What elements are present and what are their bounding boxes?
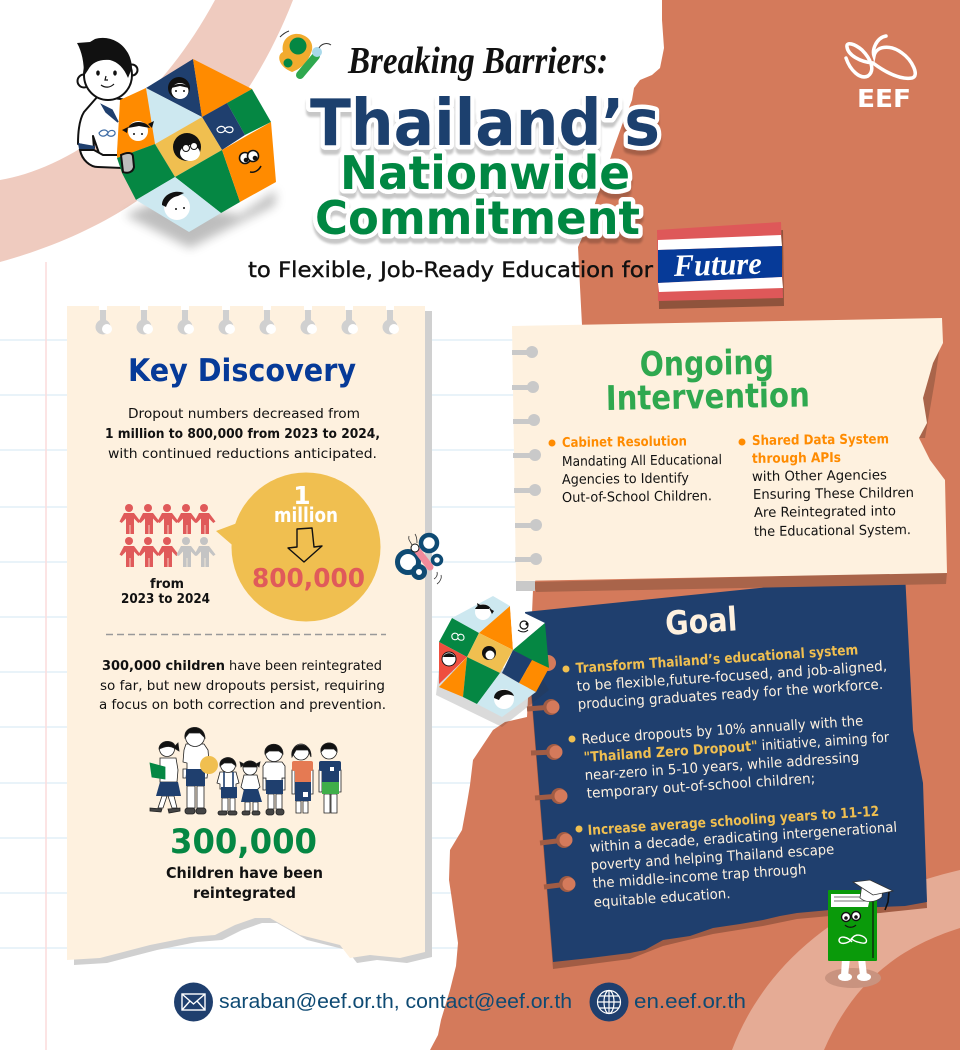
heading: Ongoing Intervention	[605, 343, 810, 419]
contact: website	[590, 982, 746, 1022]
text: dropout numbers: 1 million to 800,000 from 2023 to 2024,	[105, 426, 380, 442]
text: dropout numbers: Dropout numbers decreased from	[128, 406, 360, 422]
paper shadow	[525, 579, 927, 969]
contact: email: saraban@eef.or.th, contact@eef.or.th	[219, 991, 572, 1013]
item: Cabinet Resolution: Agencies to Identify	[562, 470, 689, 488]
girl with pigtails	[240, 761, 262, 815]
goal item 3	[576, 804, 898, 911]
boy navy shirt green shorts	[319, 743, 341, 813]
callout: 1 million to 800,000: million	[274, 503, 338, 527]
goal item 1: to be flexible,future-focused, and job-aligned,	[576, 658, 888, 695]
contact: email	[174, 982, 572, 1022]
item: Shared Data System: Are Reintegrated into	[754, 503, 896, 521]
graduation cap	[853, 880, 893, 910]
logo: EEF: EEF	[857, 84, 911, 113]
title: Thailand's Nationwide Commitment: Nationwide	[340, 146, 630, 200]
goal item 1: producing graduates ready for the workforce.	[577, 677, 884, 713]
text: dropout numbers	[105, 406, 380, 462]
boy with suspenders	[217, 758, 239, 815]
panel: Goal	[525, 573, 927, 969]
flag: Future	[657, 222, 784, 309]
goal item 2: near-zero in 5-10 years, while addressing	[584, 750, 860, 784]
title: Thailand's Nationwide Commitment: Thailand’s	[310, 87, 660, 161]
icon: green book mascot	[825, 880, 893, 988]
heading: Goal: Goal	[664, 599, 738, 643]
mascot: boy with school shirt	[77, 38, 138, 168]
item: Shared Data System: Ensuring These Children	[753, 485, 914, 503]
text: 300,000 children reintegrated: 300,000 children have been reintegrated	[102, 658, 382, 674]
text: 300,000 children reintegrated	[99, 658, 386, 713]
title: Thailand's Nationwide Commitment: Commitment	[315, 191, 640, 245]
goal item 3: poverty and helping Thailand escape	[590, 842, 835, 874]
background: torn terracotta paper	[430, 0, 960, 1050]
item: Shared Data System	[738, 431, 914, 540]
goal item 3: Increase average schooling years to 11-12	[587, 804, 880, 839]
icon: globe	[598, 990, 620, 1014]
label: from 2023 to 2024: from	[150, 577, 184, 592]
label: from 2023 to 2024: 2023 to 2024	[121, 592, 210, 607]
background: light arc bottom right	[732, 870, 960, 1050]
binder holes	[527, 655, 576, 892]
spiral binding holes	[96, 305, 399, 334]
callout: 1 million to 800,000: 1	[293, 481, 311, 510]
icon: large folded hexagon with faces	[117, 59, 276, 232]
item: Cabinet Resolution	[548, 433, 722, 506]
background: pink arc top left	[0, 0, 293, 262]
shadow under large hexagon	[125, 190, 276, 248]
item: Cabinet Resolution: Out-of-School Children.	[562, 488, 712, 506]
panel: Key Discovery	[67, 305, 432, 965]
goal item 3: the middle-income trap through	[592, 862, 807, 892]
goal item 2: "Thailand Zero Dropout" initiative, aiming for	[583, 730, 890, 766]
title: Breaking Barriers: Breaking Barriers:	[347, 40, 608, 82]
logo: EEF	[846, 36, 915, 113]
goal item 1: Transform Thailand’s educational system	[575, 642, 859, 677]
label: children have been reintegrated: Children have been	[166, 864, 323, 882]
panel: Ongoing Intervention	[512, 318, 947, 592]
item: Shared Data System: through APIs	[752, 450, 841, 467]
item: Cabinet Resolution: Cabinet Resolution	[562, 433, 687, 451]
icon: envelope	[182, 994, 205, 1010]
item: Shared Data System: the Educational System.	[754, 522, 911, 540]
girl with book	[150, 741, 181, 813]
icon: ten people pictogram	[120, 504, 216, 567]
goal item 3: within a decade, eradicating intergenerational	[589, 820, 898, 856]
faces on hexagon	[122, 77, 261, 220]
goal item 1	[562, 642, 888, 713]
heading: Key Discovery: Key Discovery	[128, 353, 356, 389]
item: Shared Data System: with Other Agencies	[752, 467, 887, 485]
girl orange shirt	[292, 744, 313, 813]
heading: Ongoing Intervention: Ongoing	[639, 343, 774, 385]
item: Cabinet Resolution: Mandating All Educational	[562, 452, 722, 470]
tall boy with ball	[183, 727, 218, 814]
flag: Future: Future	[672, 246, 762, 283]
subtitle: to Flexible, Job-Ready Education for	[248, 258, 653, 282]
goal item 2: temporary out-of-school children;	[586, 771, 816, 802]
icon: small hexagon with faces	[436, 596, 549, 727]
item: Shared Data System: Shared Data System	[752, 431, 889, 449]
illustration: seven students	[150, 727, 341, 815]
icon: yellow and green butterfly	[279, 31, 331, 75]
text: 300,000 children reintegrated: a focus on both correction and prevention.	[99, 697, 386, 713]
goal item 2	[568, 713, 890, 802]
text: 300,000 children reintegrated: so far, but new dropouts persist, requiring	[100, 678, 385, 694]
text: dropout numbers: with continued reductions anticipated.	[108, 446, 377, 462]
icon: navy butterfly	[398, 534, 442, 584]
callout: 1 million to 800,000: 800,000	[252, 564, 365, 594]
callout: 1 million to 800,000	[216, 472, 380, 622]
goal item 2: Reduce dropouts by 10% annually with the	[581, 713, 864, 748]
label: from 2023 to 2024	[121, 577, 210, 607]
label: children have been reintegrated	[166, 864, 323, 902]
arrow down	[288, 528, 322, 562]
number: 300,000: 300,000	[170, 822, 317, 862]
label: children have been reintegrated: reintegrated	[193, 884, 296, 902]
heading: Ongoing Intervention: Intervention	[605, 375, 810, 419]
binder holes	[512, 346, 542, 565]
goal item 3: equitable education.	[593, 886, 731, 911]
title: Thailand's Nationwide Commitment	[310, 87, 660, 245]
contact: website: en.eef.or.th	[634, 991, 746, 1013]
boy white shirt	[263, 744, 285, 815]
